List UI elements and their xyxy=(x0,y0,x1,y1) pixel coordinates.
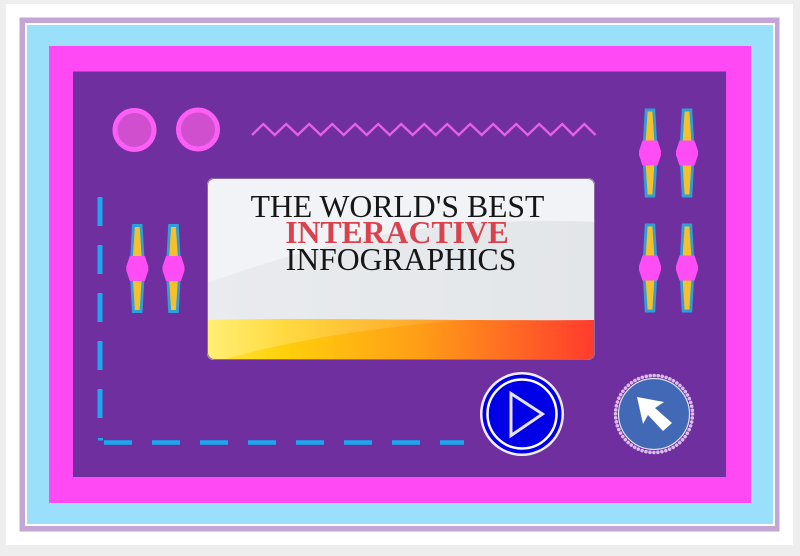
title text xyxy=(251,189,544,277)
dashed corner line xyxy=(98,197,464,442)
title text: THE WORLD'S BEST xyxy=(251,189,544,224)
decorative circles xyxy=(115,110,218,150)
title card xyxy=(207,178,595,360)
sliders bottom right xyxy=(639,224,698,312)
arrow icon xyxy=(637,397,672,431)
cursor button xyxy=(616,376,692,452)
sliders left xyxy=(126,224,184,313)
gold band xyxy=(207,319,595,360)
purple panel xyxy=(73,72,726,477)
title text: INTERACTIVE xyxy=(285,215,509,250)
sliders top right xyxy=(639,108,698,198)
play button xyxy=(480,372,564,456)
magenta panel xyxy=(49,46,751,503)
title text: INFOGRAPHICS xyxy=(286,242,516,277)
zigzag line xyxy=(252,124,596,135)
